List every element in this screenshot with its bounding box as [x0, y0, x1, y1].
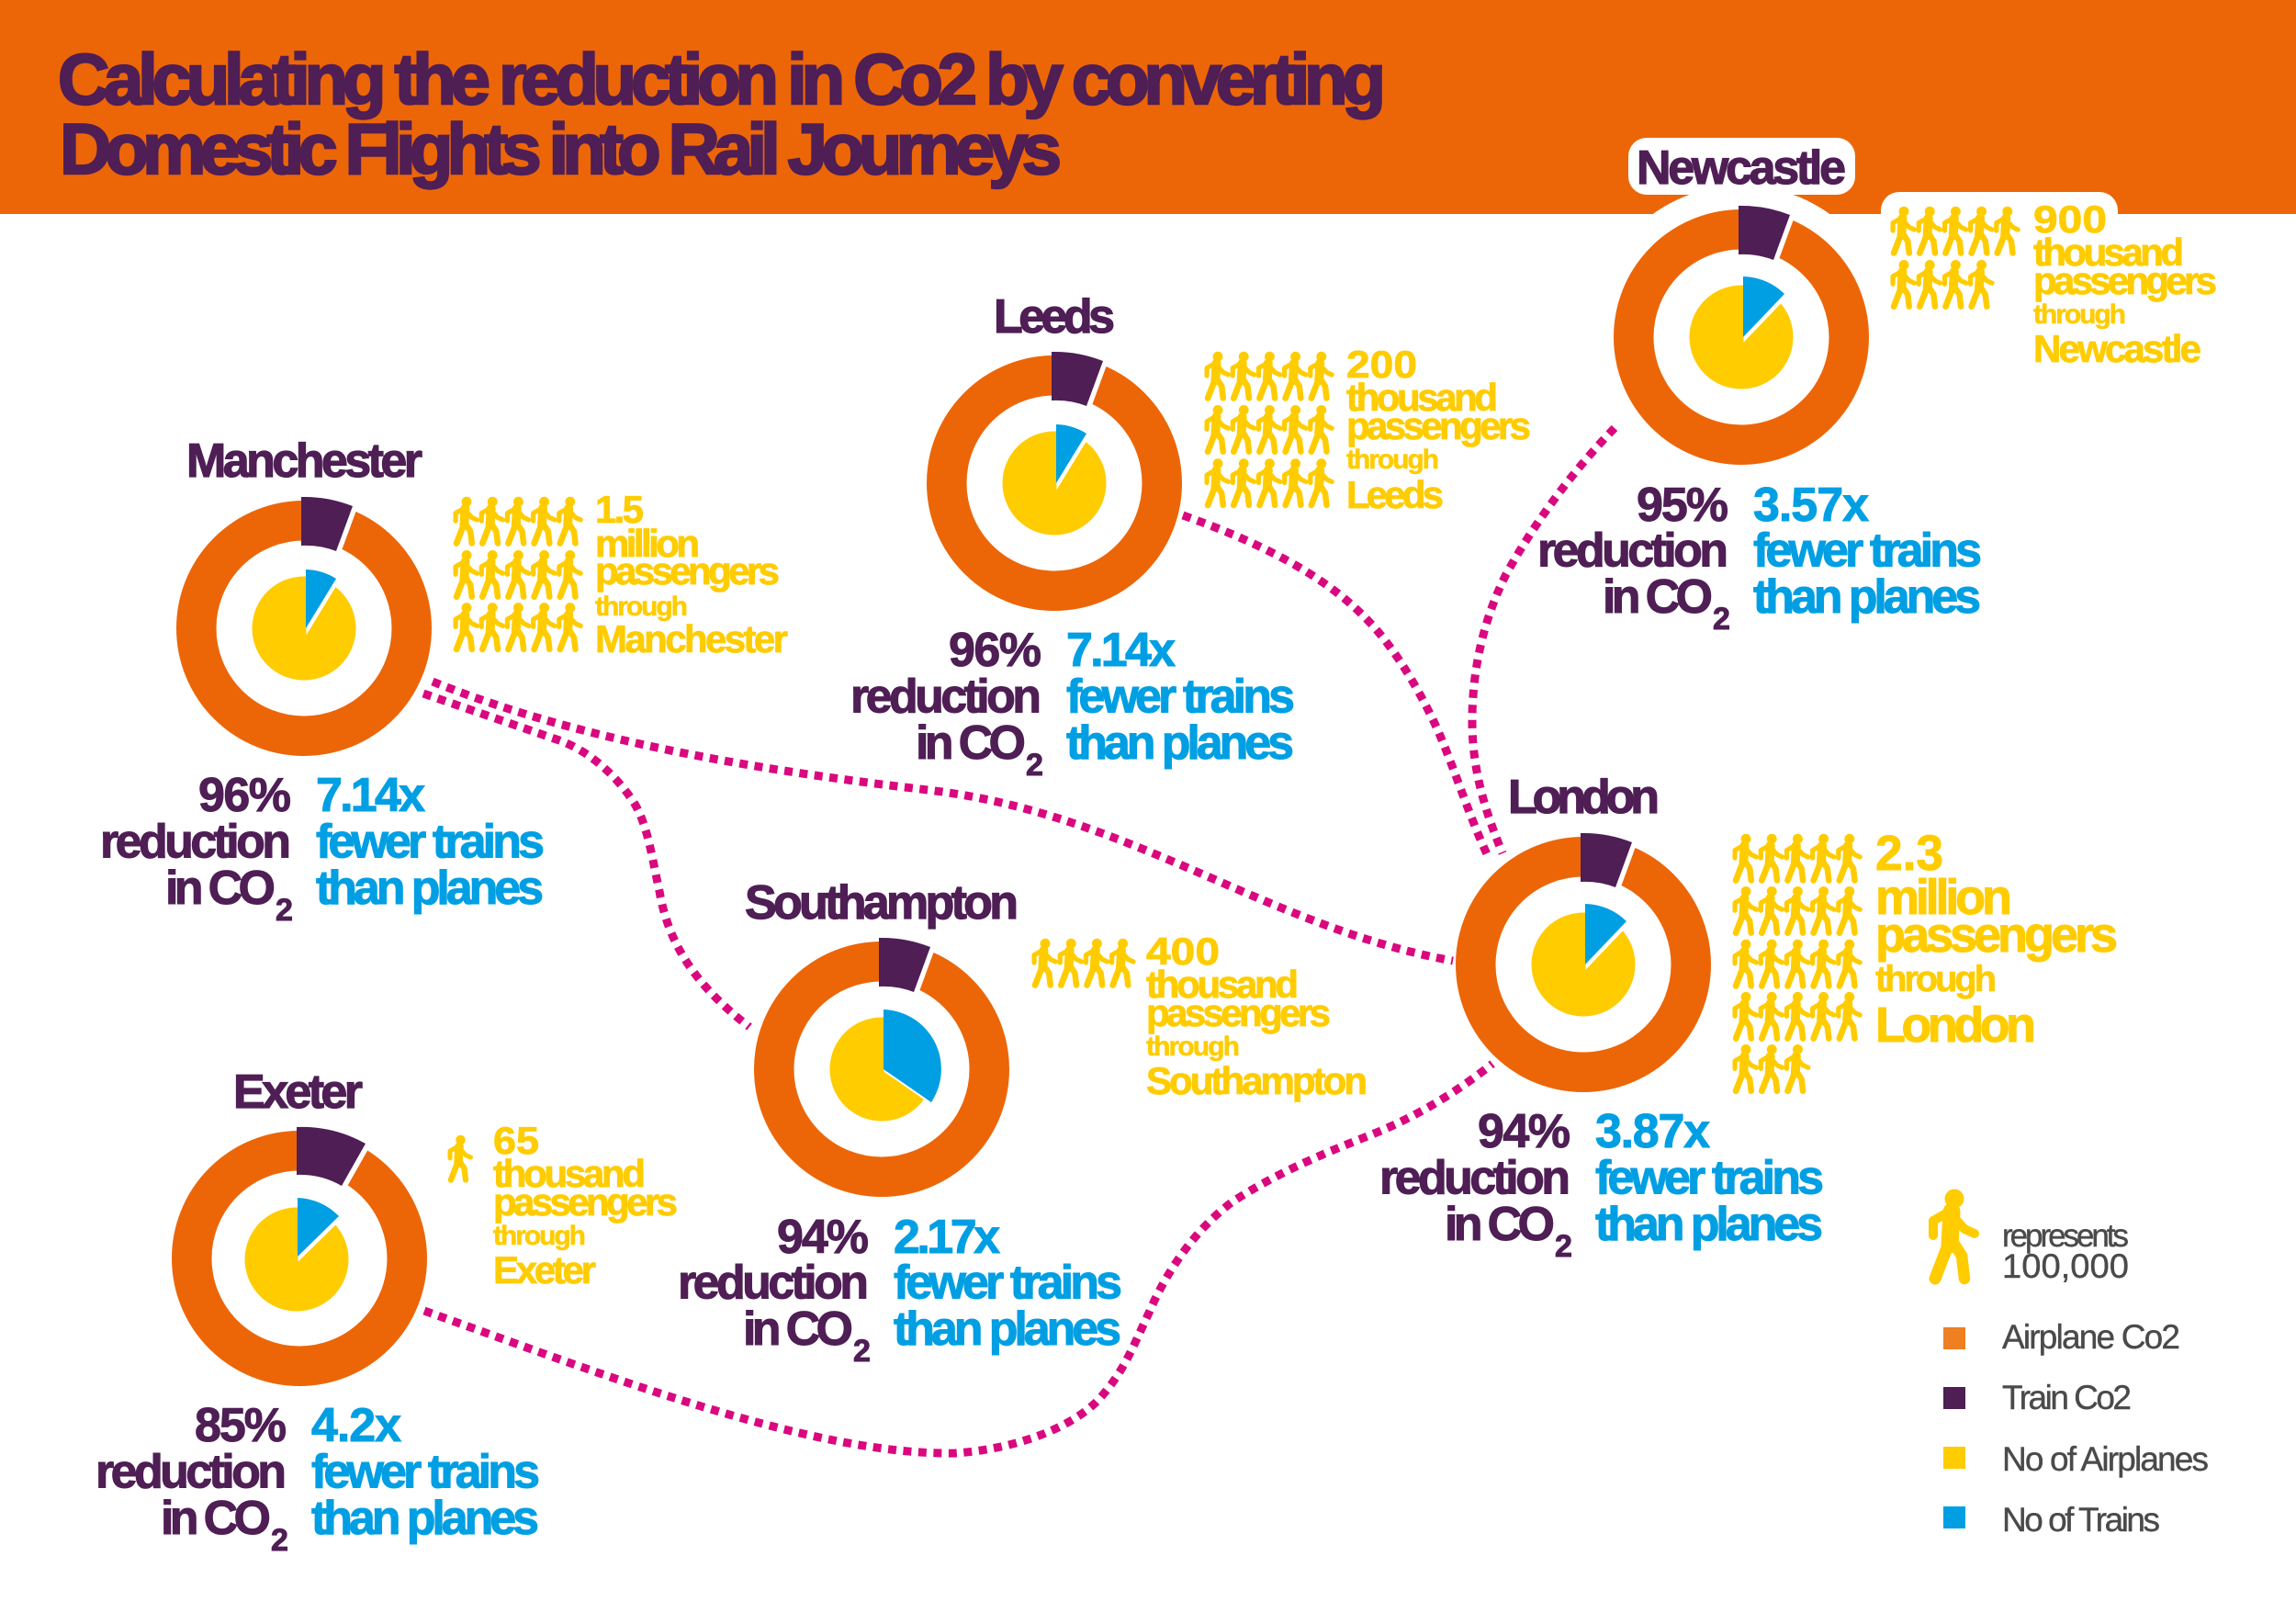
donut: London [1476, 833, 1691, 1072]
donut: Exeter [192, 1127, 407, 1366]
white halos behind Newcastle [1590, 138, 2118, 489]
passenger text: Manchester: through [595, 592, 688, 622]
title [58, 39, 1386, 189]
stats: Manchester [100, 769, 545, 928]
passenger text: Southampton: 400 [1146, 930, 1220, 973]
passenger text: London: London [1875, 998, 2036, 1053]
stats: Newcastle [1537, 479, 1982, 637]
stats: Exeter: 85% [195, 1399, 287, 1452]
legend text: represents 100,000 [2002, 1218, 2129, 1285]
stats: Southampton: 94% [777, 1211, 869, 1264]
passenger text: London: passengers [1875, 908, 2118, 963]
passenger text: Newcastle: 900 [2033, 197, 2107, 241]
passenger text: Newcastle [2033, 197, 2217, 370]
connector: Manchester to Southampton [423, 694, 749, 1027]
city name: Exeter: Exeter [233, 1066, 363, 1119]
city name: Newcastle: Newcastle [1637, 141, 1846, 195]
stats: Newcastle: 95% [1637, 479, 1728, 532]
city name: Southampton: Southampton [745, 876, 1019, 930]
header band [0, 0, 2296, 214]
legend item: Train Co2 [1943, 1379, 2132, 1416]
connector: Manchester to London [433, 682, 1453, 961]
passenger text: Southampton [1146, 930, 1367, 1102]
passenger text: Leeds [1346, 343, 1531, 516]
passenger text: Leeds: Leeds [1346, 473, 1444, 516]
donut: Leeds [947, 352, 1162, 591]
stats: Exeter [96, 1399, 540, 1558]
legend item: Airplane Co2: Airplane Co2 [2002, 1318, 2180, 1356]
passenger text: London: 2.3 [1875, 826, 1943, 881]
stats: London: 3.87x [1595, 1105, 1710, 1158]
panel: Exeter [96, 1066, 678, 1558]
stats: London: 94% [1478, 1105, 1570, 1158]
panel: London [1379, 771, 2118, 1264]
panel: Manchester [100, 434, 788, 928]
passenger text: Newcastle: Newcastle [2033, 327, 2201, 370]
passenger text: London: through [1875, 959, 1997, 999]
passenger text: Exeter: thousand [493, 1152, 646, 1195]
legend item: No of Airplanes: No of Airplanes [2002, 1440, 2209, 1478]
passenger text: London: million [1875, 870, 2012, 925]
stats: Manchester: 96% [198, 769, 291, 822]
connector: Exeter to London [424, 1064, 1492, 1453]
passenger text: Leeds: through [1346, 445, 1439, 475]
passenger icons: Manchester [456, 497, 580, 649]
stats: Manchester: 7.14x [316, 769, 425, 822]
stats: London [1379, 1105, 1824, 1264]
passenger text: Newcastle: through [2033, 299, 2126, 330]
passenger text: Exeter: passengers [493, 1180, 678, 1224]
legend [1933, 1189, 2209, 1539]
stats: Newcastle: 3.57x [1753, 479, 1869, 532]
passenger text: Southampton: passengers [1146, 991, 1331, 1034]
donut: Southampton [774, 938, 989, 1177]
passenger text: Manchester [595, 488, 788, 660]
title: Domestic Flights into Rail Journeys [60, 108, 1062, 189]
stats: Leeds [850, 624, 1295, 783]
passenger text: Southampton: through [1146, 1032, 1240, 1062]
panel: Newcastle [1537, 141, 2217, 637]
passenger icons: Southampton [1034, 939, 1133, 985]
passenger text: Newcastle: passengers [2033, 259, 2217, 302]
passenger icons: Leeds [1207, 352, 1332, 505]
city name: Manchester: Manchester [186, 434, 422, 488]
passenger text: Exeter: through [493, 1221, 586, 1251]
passenger text: Leeds: thousand [1346, 376, 1498, 419]
passenger text: Exeter: Exeter [493, 1248, 596, 1291]
passenger text: Exeter [493, 1119, 678, 1291]
legend item: No of Trains: No of Trains [2002, 1501, 2160, 1539]
passenger icon: Exeter [450, 1135, 470, 1179]
passenger text: Southampton: Southampton [1146, 1059, 1367, 1102]
passenger text: Manchester: million [595, 522, 700, 565]
legend text: represents 100,000: 100,000 [2002, 1247, 2129, 1285]
stats: Southampton: 2.17x [894, 1211, 1000, 1264]
title: Calculating the reduction in Co2 by converting [58, 39, 1386, 119]
panel: Leeds [850, 290, 1531, 783]
passenger text: Exeter: 65 [493, 1119, 539, 1162]
stats: Leeds: 7.14x [1066, 624, 1176, 677]
city name: London: London [1508, 771, 1660, 824]
panel: Southampton [678, 876, 1367, 1369]
stats: Leeds: 96% [949, 624, 1041, 677]
connector: Leeds to London [1183, 515, 1489, 858]
stats: Exeter: 4.2x [311, 1399, 401, 1452]
legend item: Train Co2: Train Co2 [2002, 1379, 2132, 1416]
passenger text: Manchester: Manchester [595, 617, 788, 660]
passenger text: Leeds: 200 [1346, 343, 1417, 386]
connector: Newcastle to London [1472, 428, 1615, 853]
passenger text: London [1875, 826, 2118, 1053]
city name: Leeds: Leeds [994, 290, 1115, 344]
passenger icons: Newcastle [1893, 207, 2018, 307]
icon: walker represents 100,000 [1933, 1189, 1975, 1279]
passenger text: Leeds: passengers [1346, 404, 1531, 447]
passenger text: Southampton: thousand [1146, 963, 1299, 1006]
stats: Southampton [678, 1211, 1122, 1369]
donut: Manchester [197, 497, 411, 736]
passenger text: Newcastle: thousand [2033, 231, 2184, 274]
passenger icons: London [1735, 834, 1860, 1091]
passenger text: Manchester: 1.5 [595, 488, 644, 531]
passenger text: Manchester: passengers [595, 549, 780, 592]
legend text: represents 100,000: represents [2002, 1218, 2129, 1254]
donut: Newcastle [1634, 206, 1849, 445]
